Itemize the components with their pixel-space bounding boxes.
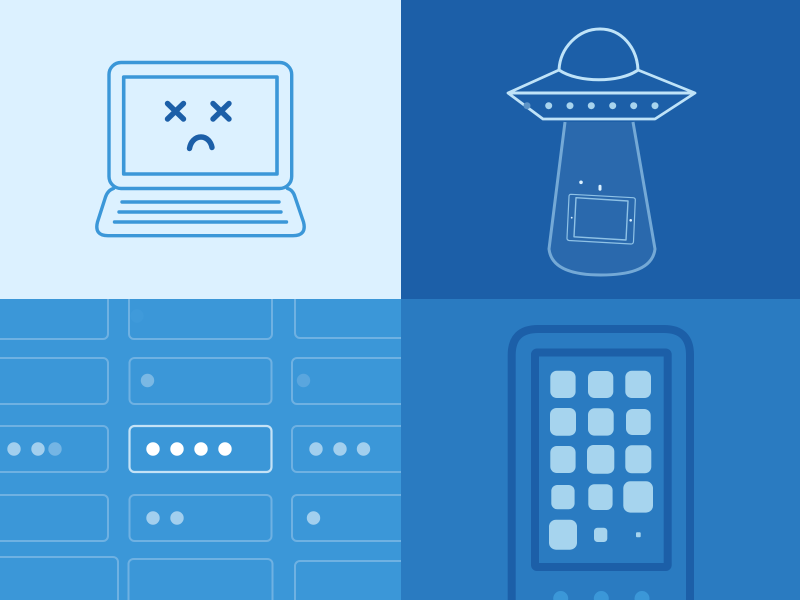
- panel: UFO abduction: [401, 0, 800, 299]
- app icons: [549, 371, 653, 550]
- UFO saucer: [508, 70, 695, 119]
- panel: broken laptop: [0, 0, 401, 299]
- icon: sad laptop: [97, 62, 304, 236]
- UFO: [508, 29, 695, 119]
- field grid: [0, 299, 401, 600]
- tablet being abducted: [567, 180, 635, 244]
- UFO lights: [524, 102, 658, 109]
- laptop base: [97, 188, 304, 236]
- dead face: [168, 104, 229, 148]
- panel: smartphone: [401, 299, 800, 600]
- laptop screen: [124, 77, 277, 174]
- laptop lid: [109, 62, 292, 188]
- tractor beam: [549, 122, 655, 275]
- active password field: [130, 426, 272, 472]
- phone buttons: [553, 591, 650, 600]
- phone body: [512, 329, 690, 600]
- password dots: [7, 374, 370, 525]
- panel: password fields: [0, 299, 401, 600]
- UFO dome: [559, 29, 638, 80]
- phone screen: [535, 352, 668, 567]
- keyboard lines: [114, 202, 286, 222]
